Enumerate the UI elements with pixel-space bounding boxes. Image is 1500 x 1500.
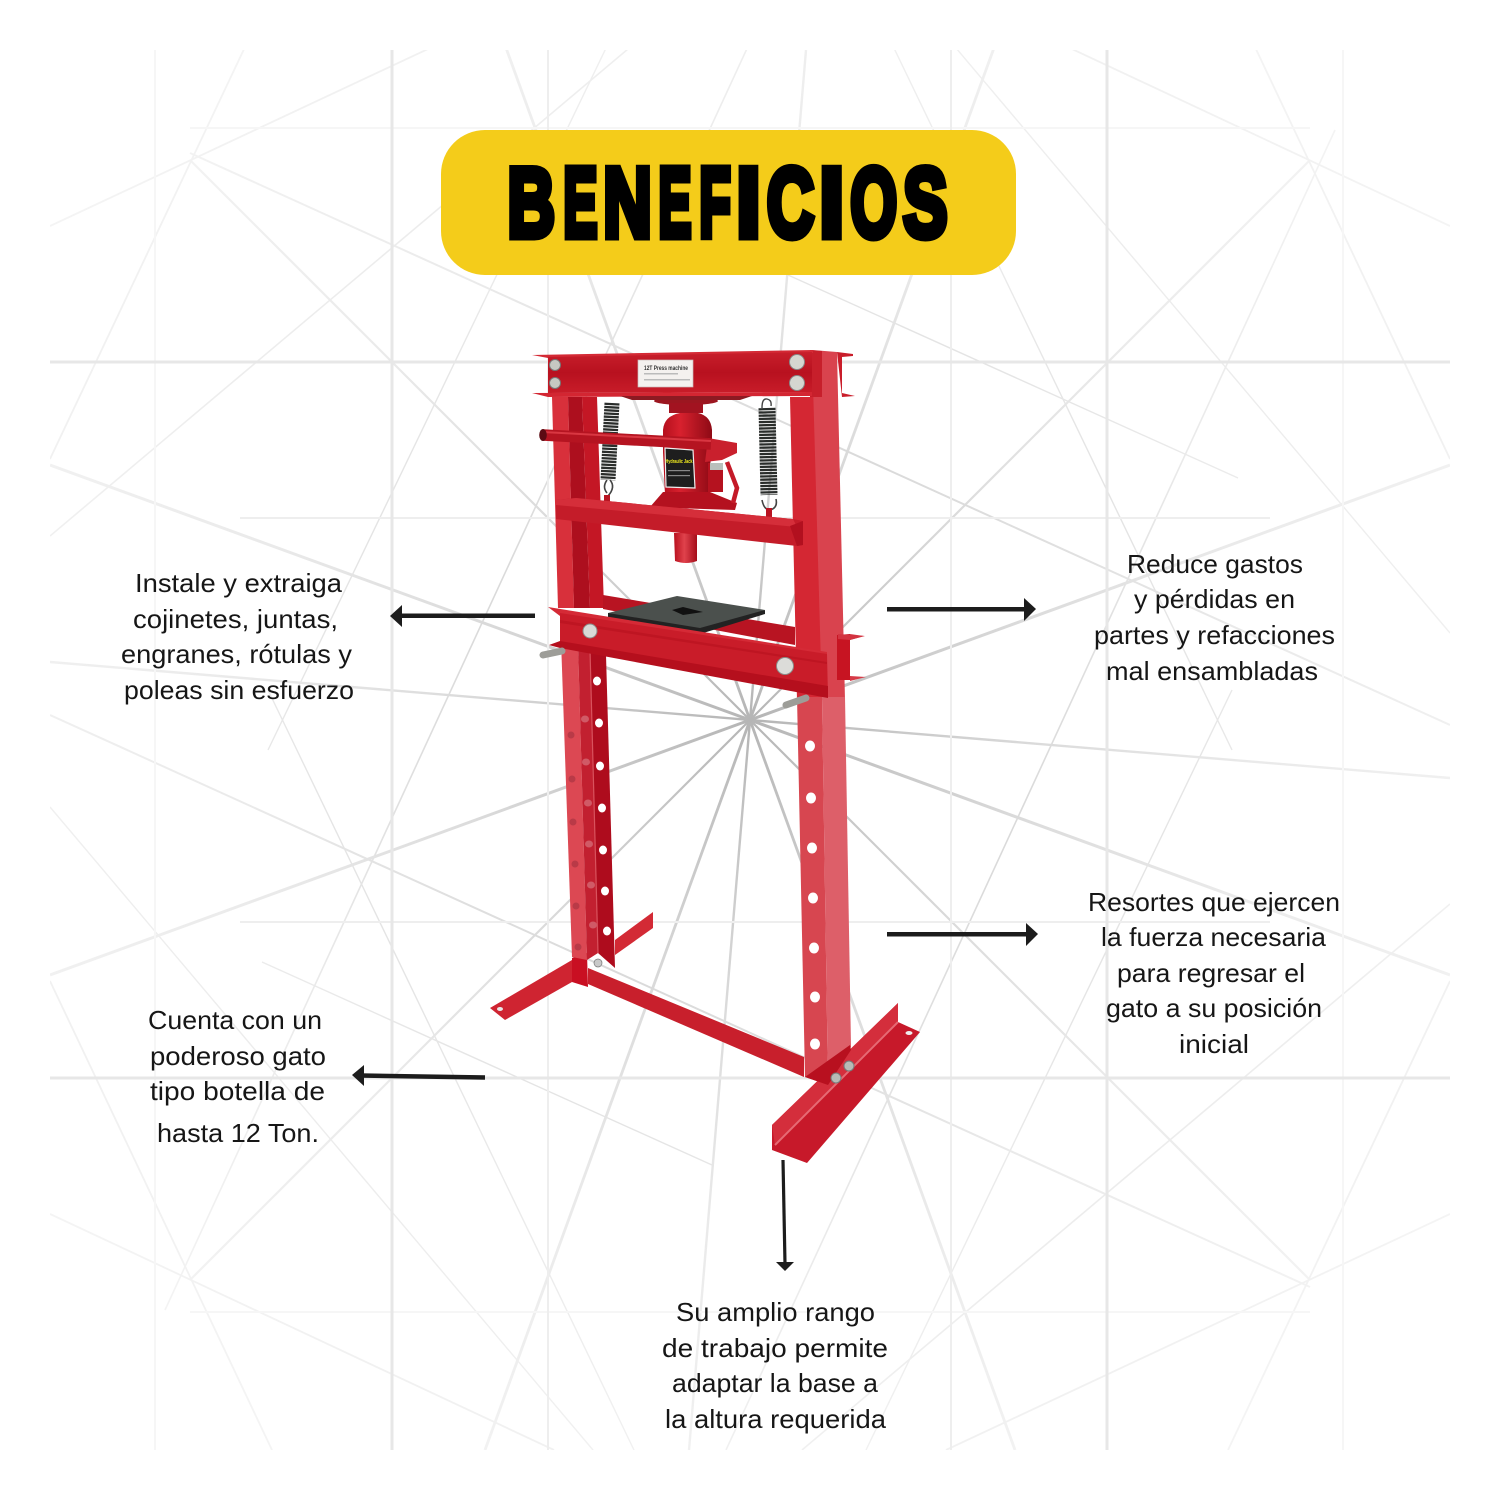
text: working range: adaptar la base a — [672, 1368, 879, 1398]
title: E — [658, 148, 692, 258]
adjustment pins — [543, 651, 806, 705]
title: S — [903, 148, 947, 258]
text: working range: la altura requerida — [665, 1404, 887, 1434]
text: reduce costs: Reduce gastos — [1127, 549, 1303, 579]
text: springs: para regresar el — [1117, 958, 1305, 988]
text: install and remove: Instale y extraiga — [135, 568, 343, 598]
top beam — [532, 350, 813, 400]
left spring — [604, 403, 613, 502]
text: springs: la fuerza necesaria — [1101, 922, 1327, 952]
title: E — [563, 148, 598, 258]
text: springs: Resortes que ejercen — [1088, 887, 1340, 917]
title: I — [819, 148, 844, 258]
right spring — [762, 399, 776, 518]
left column upper — [552, 397, 604, 608]
lower beam — [548, 607, 828, 698]
arrow: left upper — [390, 605, 535, 627]
title: O — [850, 148, 897, 258]
title: N — [603, 148, 652, 258]
text: bottle jack — [148, 1005, 326, 1148]
right column — [790, 350, 866, 700]
jack support crossbar — [556, 498, 803, 546]
title: I — [736, 148, 761, 258]
jack ram — [674, 533, 697, 563]
text: bottle jack: hasta 12 Ton. — [157, 1118, 319, 1148]
text: bottle jack: poderoso gato — [150, 1041, 326, 1071]
text: reduce costs: y pérdidas en — [1134, 584, 1295, 614]
text: reduce costs: partes y refacciones — [1094, 620, 1335, 650]
pressing plates — [608, 596, 765, 634]
model plate — [638, 360, 693, 387]
text: bottle jack: tipo botella de — [150, 1076, 325, 1106]
text: reduce costs: mal ensambladas — [1106, 656, 1318, 686]
right foot — [772, 1003, 920, 1163]
text: springs — [1088, 887, 1340, 1059]
bottle jack — [539, 397, 737, 510]
left leg with holes — [561, 640, 615, 968]
text: install and remove: poleas sin esfuerzo — [124, 675, 354, 705]
arrow: right lower — [887, 923, 1038, 946]
title badge — [441, 130, 1016, 275]
title: B — [508, 148, 555, 258]
jack label: Hydraulic Jack — [666, 459, 693, 465]
hydraulic press — [490, 350, 920, 1163]
right leg with holes — [797, 697, 851, 1085]
arrow: down — [776, 1160, 794, 1271]
text: working range: de trabajo permite — [662, 1333, 888, 1363]
rear-left foot flange — [615, 912, 653, 955]
left foot — [490, 953, 588, 1020]
text: install and remove: engranes, rótulas y — [121, 639, 352, 669]
jack label — [665, 448, 695, 488]
text: install and remove: cojinetes, juntas, — [133, 604, 338, 634]
text: bottle jack: Cuenta con un — [148, 1005, 322, 1035]
text: springs: inicial — [1179, 1029, 1249, 1059]
text: reduce costs — [1094, 549, 1335, 686]
model plate: 12T Press machine — [644, 366, 689, 372]
floor cross bar — [588, 968, 804, 1077]
title: C — [767, 148, 814, 258]
arrow: right upper — [887, 598, 1036, 621]
text: install and remove — [121, 568, 354, 705]
rear work-table beam — [603, 595, 795, 645]
arrow: left lower — [352, 1065, 485, 1086]
jack handle — [539, 429, 711, 444]
text: working range — [662, 1297, 888, 1434]
text: springs: gato a su posición — [1106, 993, 1322, 1023]
title: F — [699, 148, 731, 258]
text: working range: Su amplio rango — [676, 1297, 875, 1327]
